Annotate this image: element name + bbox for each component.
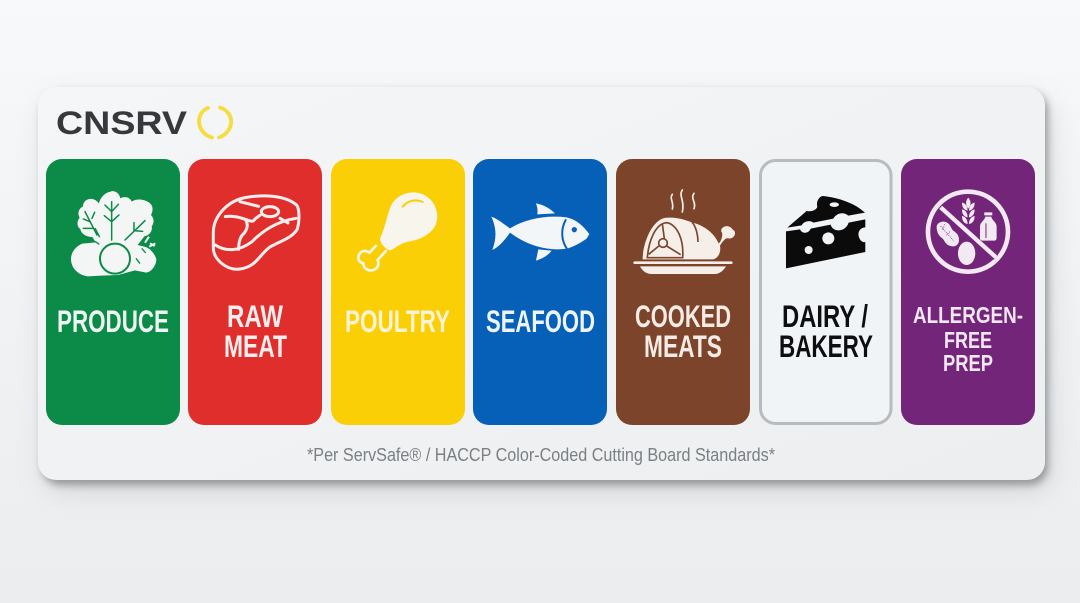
panel: produce — [46, 159, 180, 425]
label: dairy / bakery: DAIRY / — [782, 298, 868, 334]
label: dairy / bakery — [779, 298, 873, 364]
panel: raw meat — [188, 159, 322, 425]
label: allergen-free prep: ALLERGEN- — [913, 302, 1023, 328]
label: poultry: POULTRY — [345, 303, 450, 339]
label: allergen-free prep — [913, 302, 1023, 376]
panel: poultry — [331, 159, 465, 425]
label: raw meat: MEAT — [224, 328, 287, 364]
label: allergen-free prep: PREP — [943, 350, 993, 376]
panel: cooked meats — [616, 159, 750, 425]
icon: fish — [491, 203, 589, 261]
label: seafood: SEAFOOD — [486, 303, 595, 339]
icon: produce — [71, 191, 156, 276]
panel: allergen-free prep — [901, 159, 1035, 425]
label: cooked meats: MEATS — [644, 328, 722, 364]
icon: steak — [213, 196, 299, 269]
label: dairy / bakery: BAKERY — [779, 328, 873, 364]
logo: CNSRV — [56, 105, 231, 141]
label: allergen-free prep: FREE — [944, 327, 992, 353]
icon: roast — [633, 190, 735, 274]
icon: chicken leg — [358, 192, 437, 270]
panel: cutting board chart — [38, 87, 1045, 480]
label: produce: PRODUCE — [57, 303, 169, 339]
label: cooked meats: COOKED — [635, 298, 731, 334]
label: raw meat — [224, 298, 287, 364]
label: cooked meats — [635, 298, 731, 364]
icon: no allergens — [928, 192, 1008, 272]
panel: dairy / bakery — [760, 160, 891, 424]
label: raw meat: RAW — [227, 298, 283, 334]
panel: seafood — [473, 159, 607, 425]
icon: cheese — [786, 196, 865, 268]
footnote: *Per ServSafe® / HACCP Color-Coded Cutting Board Standards* — [307, 445, 775, 465]
logo: CNSRV: CNSRV — [56, 105, 188, 141]
